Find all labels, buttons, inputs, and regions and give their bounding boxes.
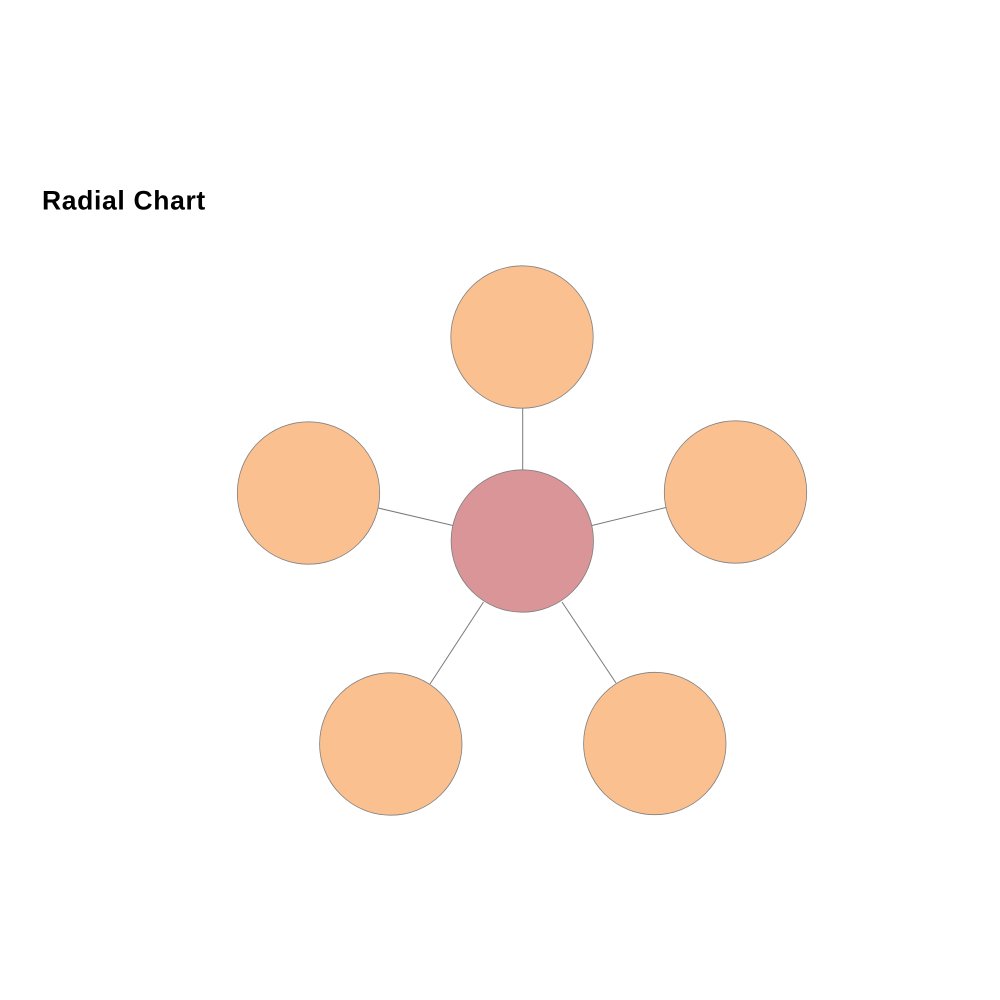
connectors <box>378 408 666 684</box>
node: left <box>237 422 380 564</box>
node: right <box>664 421 807 563</box>
node: top <box>451 266 593 408</box>
center node <box>451 470 594 612</box>
node: bottom right <box>584 672 726 815</box>
node: bottom left <box>320 673 462 815</box>
title: Radial Chart <box>42 186 206 216</box>
